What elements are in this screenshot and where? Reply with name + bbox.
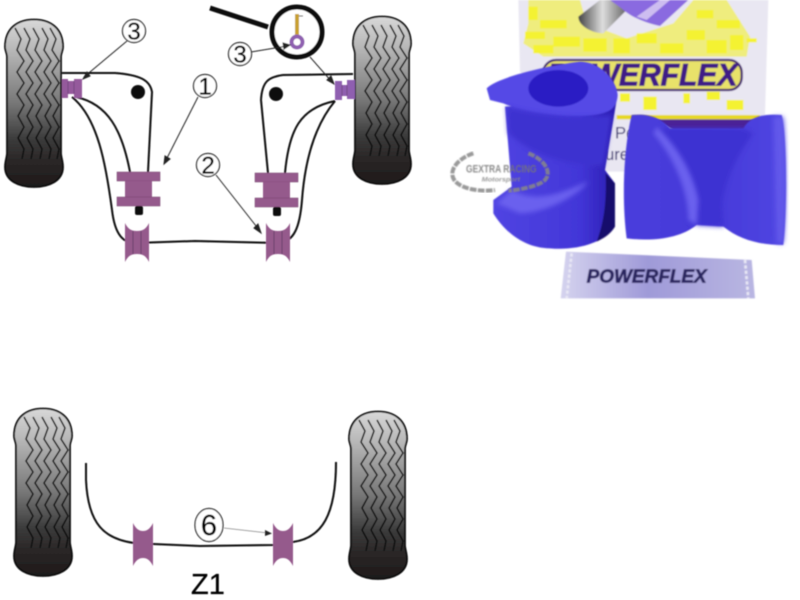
right purple bush	[624, 115, 786, 245]
saddle ridge	[653, 127, 698, 225]
label 3 left: 3	[127, 18, 141, 46]
icon: pivot black dot right	[269, 87, 283, 101]
arrow: magnifier to right bush	[310, 57, 334, 84]
arrow: label 1 to mount	[164, 97, 198, 164]
bush 2 left	[125, 223, 149, 262]
printed bush image on box	[578, 0, 688, 33]
waist shadow	[507, 107, 612, 165]
anti-roll bar	[72, 97, 335, 243]
icon: right tyre	[353, 16, 411, 184]
bush left	[133, 523, 153, 566]
right end highlight	[773, 117, 786, 243]
box small text	[605, 123, 635, 164]
watermark	[452, 153, 548, 191]
label 2: 2	[201, 152, 215, 180]
left control arm	[62, 73, 152, 172]
anti-roll bar	[86, 462, 336, 546]
bush right	[273, 523, 293, 566]
top face	[487, 62, 618, 116]
label 1	[194, 74, 216, 100]
watermark: Motorsport	[482, 177, 521, 184]
right control arm	[261, 74, 353, 173]
arrow: label 2 to bush	[216, 175, 261, 233]
icon: pivot black dot left	[131, 85, 145, 99]
label 3 magnifier	[228, 42, 252, 68]
diagram: rear suspension Z1	[14, 408, 407, 600]
bush 1 right	[255, 173, 298, 216]
label 3 magnifier: 3	[233, 42, 247, 68]
bush 2 right	[266, 223, 290, 262]
packet: POWERFLEX	[587, 266, 708, 287]
bush 3 left	[62, 79, 82, 98]
lower body	[493, 100, 617, 249]
diagram: front suspension	[5, 7, 411, 262]
hole	[528, 70, 588, 107]
icon: left tyre	[5, 20, 63, 187]
photo: Powerflex bushes and box	[452, 0, 786, 298]
product box	[518, 0, 768, 172]
bush 1 left	[117, 172, 160, 215]
box stripe	[617, 115, 760, 130]
left purple bush	[487, 62, 618, 249]
icon: right tyre	[349, 412, 407, 579]
box small text: Pe	[615, 123, 635, 142]
arrow: label 3 to left bush	[83, 41, 127, 79]
icon: magnifying glass	[210, 7, 322, 57]
label 1: 1	[198, 74, 212, 100]
arrow: label 3 to magnifier ring	[251, 43, 290, 52]
logo badge: POWERFLEX	[547, 57, 739, 92]
label 6	[195, 508, 223, 542]
arrow: label 6 to bush	[224, 528, 272, 536]
box small text: uret	[605, 145, 634, 164]
packet	[561, 252, 755, 298]
highlight	[497, 182, 588, 213]
bush 3 right	[335, 80, 355, 100]
icon: left tyre	[14, 408, 72, 576]
label 3 left	[122, 18, 146, 46]
label 6: 6	[201, 510, 217, 542]
label 2	[196, 152, 220, 180]
yellow box pattern	[523, 0, 757, 110]
watermark: GEXTRA RACING	[466, 164, 537, 176]
center saddle shadow	[657, 128, 753, 227]
dark side shadow	[597, 173, 615, 242]
